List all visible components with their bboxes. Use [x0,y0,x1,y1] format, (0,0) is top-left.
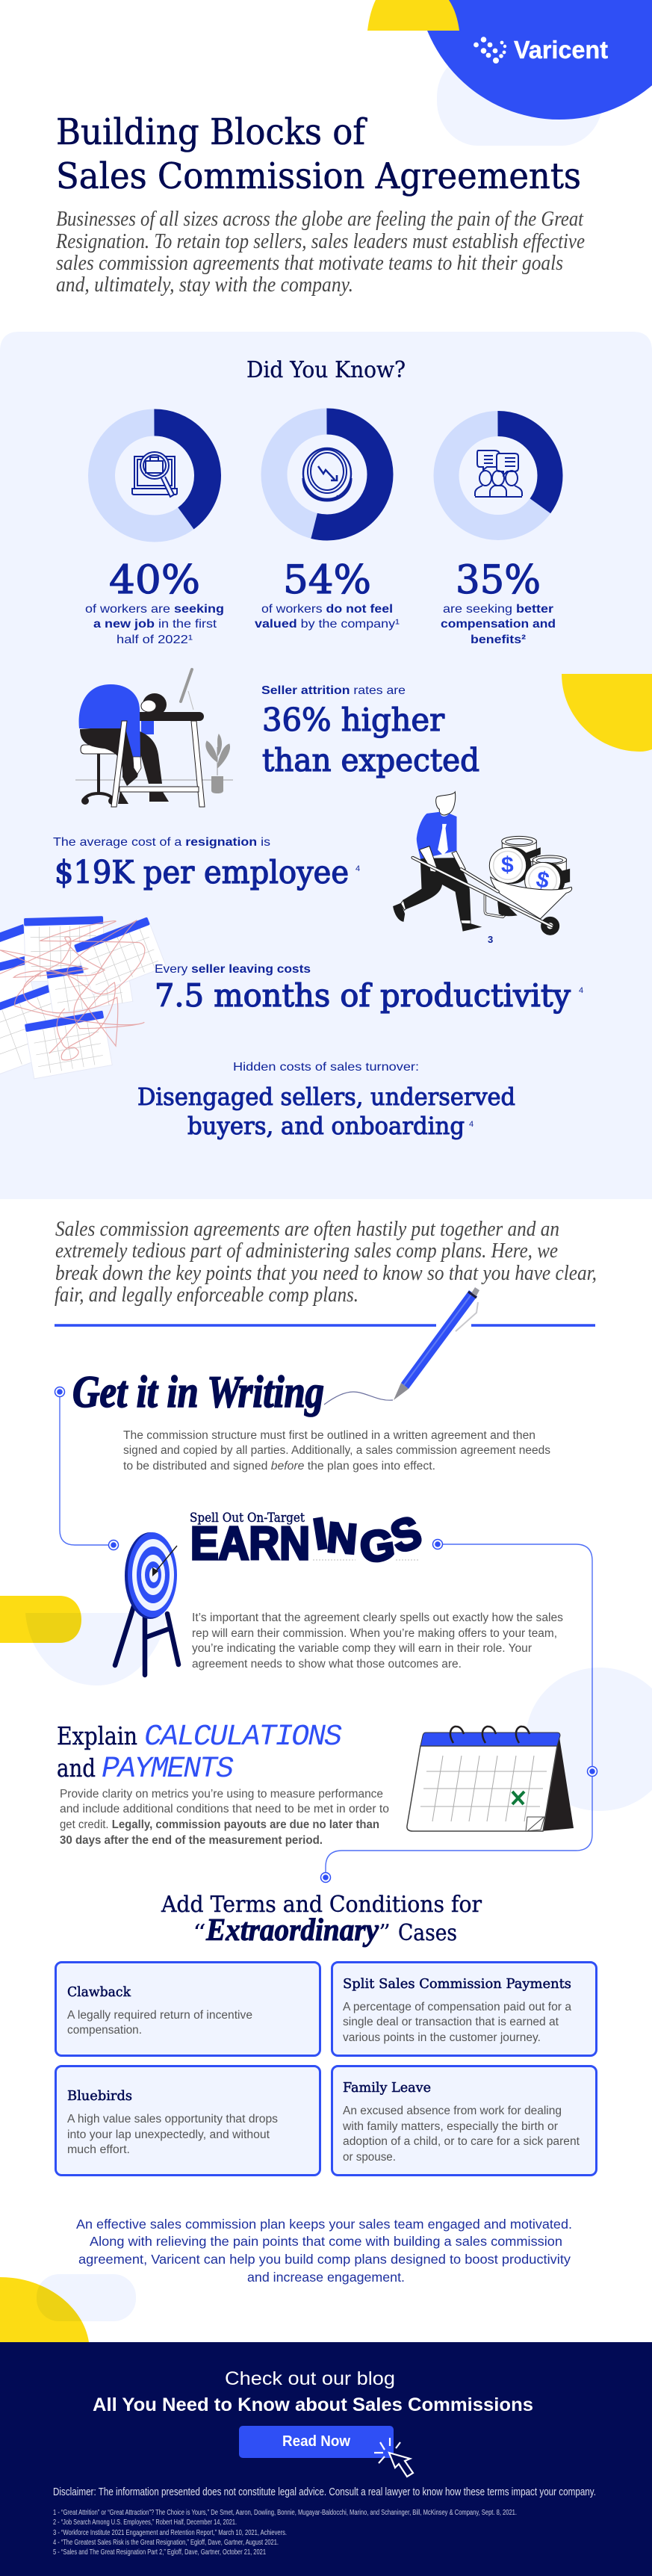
text: calculations and payments: 30 days after the end of the measurement period. [60,1834,323,1847]
text: on-target earnings: you’re indicating the variable comp they will earn in their role. Your [192,1642,532,1655]
stat: 35 percent: benefits² [471,634,526,646]
closing paragraph: agreement, Varicent can help you build comp plans designed to boost productivity [78,2252,571,2267]
heading: explain calculations and payments: Explain [57,1721,137,1750]
text: calculations and payments: Provide clarity on metrics you’re using to measure performance [60,1788,383,1801]
logo: Varicent [474,36,608,64]
card: bluebirds [55,2066,320,2176]
card: split sales commission payments: Split Sales Commission Payments [343,1976,571,1992]
footnotes: 4 - “The Greatest Sales Risk is the Great Resignation,” Egloff, Dave, Gartner, August 2021. [53,2538,279,2547]
stat: 54 percent: of workers do not feel [261,603,393,616]
card: split sales commission payments [332,1962,596,2056]
stat: 40 percent: half of 2022¹ [117,634,193,646]
card: clawback: compensation. [67,2024,142,2037]
heading: did you know: Did You Know? [246,357,406,383]
closing paragraph: An effective sales commission plan keeps your sales team engaged and motivated. [76,2217,572,2232]
donut: 54 percent [274,421,380,527]
stat: 40 percent [85,558,224,646]
heading: add terms and conditions: “ [193,1920,206,1946]
intro paragraph [55,208,585,297]
text: calculations and payments [60,1788,389,1847]
section intro paragraph: fair, and legally enforceable comp plans. [55,1284,358,1307]
stat: 54 percent [255,558,400,631]
donut: 40 percent [102,423,208,529]
connector line through steps [60,1397,592,1872]
footer panel [0,2342,652,2576]
heading: explain calculations and payments: CALCULATIONS [144,1721,342,1754]
button: read now: Read Now [282,2433,350,2450]
text: calculations and payments: and include additional conditions that need to be met in order to [60,1803,389,1815]
decorative yellow half circle [562,674,652,752]
intro paragraph: sales commission agreements that motivate teams to hit their goals [56,252,563,275]
card: split sales commission payments: single deal or transaction that is earned at [343,2016,559,2028]
card: bluebirds: A high value sales opportunity that drops [67,2113,278,2125]
closing paragraph [76,2217,572,2285]
stat: 35 percent: compensation and [441,618,556,631]
closing paragraph: Along with relieving the pain points that come with building a sales commission [90,2234,562,2249]
stat: productivity: 4 [579,986,583,995]
panel: did you know [0,332,652,1199]
illustration: pen and ink line [324,1287,479,1405]
step 4 marker [321,1872,330,1883]
heading: spell out on-target earnings: EARN [190,1518,310,1570]
decorative bottom shapes [0,2274,136,2342]
stat: hidden costs [137,1061,515,1140]
closing paragraph: and increase engagement. [247,2270,405,2285]
heading: spell out on-target earnings: I [310,1509,331,1559]
intro paragraph: Businesses of all sizes across the globe are feeling the pain of the Great [56,208,584,231]
footnotes: 2 - “Job Search Among U.S. Employees,” Robert Half, December 14, 2021. [53,2518,237,2527]
heading: explain calculations and payments: PAYMENTS [102,1753,234,1786]
illustration: exhausted seller at desk [75,669,233,807]
heading: add terms and conditions: Cases [398,1920,457,1946]
footnote marker 3: 3 [488,934,493,945]
illustration: man with wheelbarrow of coins [394,792,572,935]
card: family leave: An excused absence from work for dealing [343,2105,562,2117]
card: clawback: A legally required return of incentive [67,2009,252,2022]
heading: spell out on-target earnings: Spell Out On-Target [190,1511,305,1526]
step 1 marker [55,1387,64,1397]
intro paragraph: Resignation. To retain top sellers, sales leaders must establish effective [55,230,585,253]
blog call to action: Check out our blog [225,2368,395,2389]
title: Sales Commission Agreements [56,155,581,197]
step 2 to 3 marker [587,1766,597,1777]
logo: Varicent: Varicent [514,36,608,64]
illustration: calendar [407,1727,574,1831]
blog call to action [93,2368,533,2415]
stat: cost of resignation [53,836,360,891]
text: on-target earnings [192,1611,563,1671]
heading: add terms and conditions: ” [379,1920,391,1946]
card: bluebirds: much effort. [67,2143,130,2156]
text: calculations and payments: get credit. Legally, commission payouts are due no later than [60,1818,379,1831]
stat: cost of resignation: 4 [356,864,360,873]
title [56,111,581,197]
stat: attrition: Seller attrition rates are [261,684,406,697]
title: Building Blocks of [56,111,367,153]
icon: click cursor [374,2438,413,2477]
text: get it in writing: signed and copied by all parties. Additionally, a sales commission agreement needs [123,1444,550,1457]
stat: 40 percent: a new job in the first [93,618,217,631]
stat: 40 percent: 40% [109,558,200,603]
stat: productivity: Every seller leaving costs [155,963,311,976]
decorative header shapes [367,0,652,146]
footnotes [53,2508,517,2557]
stat: 40 percent: of workers are seeking [85,603,224,616]
stat: 35 percent: are seeking better [443,603,553,616]
text: get it in writing: The commission structure must first be outlined in a written agreement and then [123,1429,535,1442]
section intro paragraph [55,1218,597,1307]
card: bluebirds: Bluebirds [67,2088,132,2104]
card: clawback: Clawback [67,1984,131,2000]
illustration: target with arrow [115,1532,178,1675]
section intro paragraph: Sales commission agreements are often hastily put together and an [55,1218,559,1241]
card: family leave: with family matters, especially the birth or [342,2120,558,2133]
illustration: scribbled calendars [0,916,166,1079]
text: get it in writing [123,1429,550,1473]
heading: add terms and conditions: Extraordinary [205,1913,379,1948]
text: on-target earnings: rep will earn their commission. When you’re making offers to your team, [192,1627,557,1640]
stat: 35 percent [441,558,556,646]
heading: add terms and conditions: Add Terms and Conditions for [161,1892,482,1918]
icon: falling coin [303,448,351,501]
stat: 35 percent: 35% [456,558,541,603]
card: family leave [332,2066,596,2176]
intro paragraph: and, ultimately, stay with the company. [56,273,353,297]
card: family leave: or spouse. [343,2151,396,2164]
card: split sales commission payments: various points in the customer journey. [343,2031,541,2044]
heading: get it in writing: Get it in Writing [72,1367,324,1417]
heading: spell out on-target earnings: N [325,1513,359,1563]
button: read now [239,2426,394,2458]
stat: hidden costs: Hidden costs of sales turnover: [233,1061,419,1074]
stat: hidden costs: Disengaged sellers, underserved [137,1083,515,1111]
stat: attrition: than expected [262,742,479,778]
card: bluebirds: into your lap unexpectedly, and without [67,2128,270,2141]
stat: 54 percent: valued by the company¹ [255,618,400,631]
stat: cost of resignation: $19K per employee [55,854,349,891]
section intro paragraph: extremely tedious part of administering sales comp plans. Here, we [55,1239,558,1263]
stat: hidden costs: buyers, and onboarding [187,1112,465,1140]
heading: spell out on-target earnings [190,1506,427,1573]
card: clawback [55,1962,320,2056]
stat: 54 percent: 54% [283,558,371,603]
blog call to action: All You Need to Know about Sales Commissions [93,2394,533,2415]
stat: hidden costs: 4 [469,1120,474,1129]
heading: explain calculations and payments [57,1721,342,1786]
text: get it in writing: to be distributed and signed before the plan goes into effect. [123,1460,435,1473]
heading: add terms and conditions [161,1892,482,1948]
stat: attrition [261,684,479,778]
card: family leave: adoption of a child, or to care for a sick parent [343,2135,580,2148]
footnotes: 3 - “Workforce Institute 2021 Engagement and Retention Report,” March 10, 2021, Achievers. [53,2528,287,2537]
donut: 35 percent [447,424,550,527]
heading: spell out on-target earnings: S [385,1506,427,1563]
illustration: man with wheelbarrow of coins: $ [534,867,552,894]
decorative yellow and pale shapes [0,1596,652,1811]
icon: job search laptop [132,452,177,497]
text: on-target earnings: It’s important that the agreement clearly spells out exactly how the sales [192,1611,563,1624]
stat: cost of resignation: The average cost of a resignation is [53,836,270,849]
stat: productivity: 7.5 months of productivity [155,977,571,1014]
illustration: man with wheelbarrow of coins: $ [501,853,514,878]
step 2 markers [109,1539,442,1549]
text: on-target earnings: agreement needs to show what those outcomes are. [192,1658,462,1671]
card: family leave: Family Leave [343,2080,431,2096]
footnotes: 5 - “Sales and The Great Resignation Part 2,” Egloff, Dave, Gartner, October 21, 2021 [53,2548,266,2557]
icon: team with compensation bubbles [475,451,522,497]
heading: spell out on-target earnings: G [357,1520,398,1573]
stat: attrition: 36% higher [262,702,445,738]
section intro paragraph: break down the key points that you need to know so that you have clear, [55,1262,597,1285]
heading: explain calculations and payments: and [57,1753,96,1783]
card: split sales commission payments: A percentage of compensation paid out for a [343,2001,571,2013]
